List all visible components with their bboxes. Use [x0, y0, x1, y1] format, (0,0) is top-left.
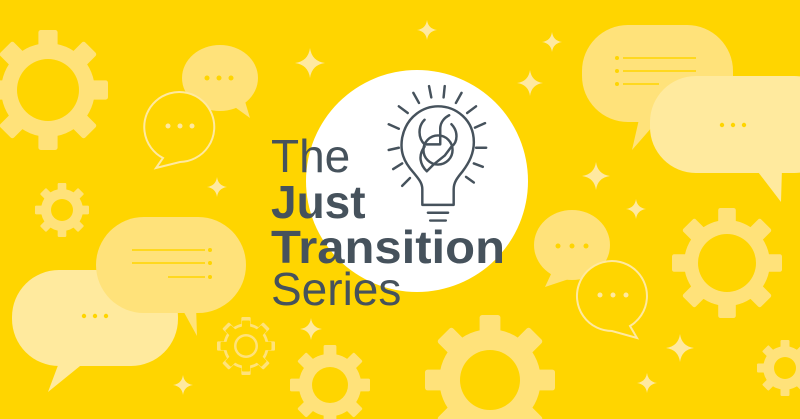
icon: bubble with lines left: [96, 217, 246, 336]
title text: Transition: [271, 221, 505, 273]
icon: light bubble right: [650, 76, 800, 202]
icon: speech bubble outlined left: [144, 92, 214, 168]
icon: gear bottom center: [425, 315, 555, 419]
icon: big gear top-left: [0, 30, 108, 150]
icon: lightbulb: [389, 86, 486, 221]
icon: outline gear bottom-left: [217, 317, 275, 375]
icon: sparkle stars: [173, 20, 694, 395]
icon: speech bubble top-left solid: [182, 45, 258, 118]
title text: The: [271, 130, 350, 182]
icon: bubble with lines top-right: [582, 25, 733, 150]
icon: big gear right: [672, 208, 782, 318]
white circle: [306, 70, 528, 292]
icon: big bubble lower-left light: [12, 270, 178, 392]
icon: gear bottom center-left: [290, 345, 370, 419]
icon: solid bubble right: [534, 210, 610, 287]
icon: small gear left: [35, 183, 89, 237]
title text: Just: [271, 176, 366, 228]
icon: small gear bottom-right: [757, 340, 800, 396]
title text: Series: [271, 263, 401, 315]
title text: [272, 138, 502, 306]
icon: outlined bubble right: [577, 261, 647, 338]
